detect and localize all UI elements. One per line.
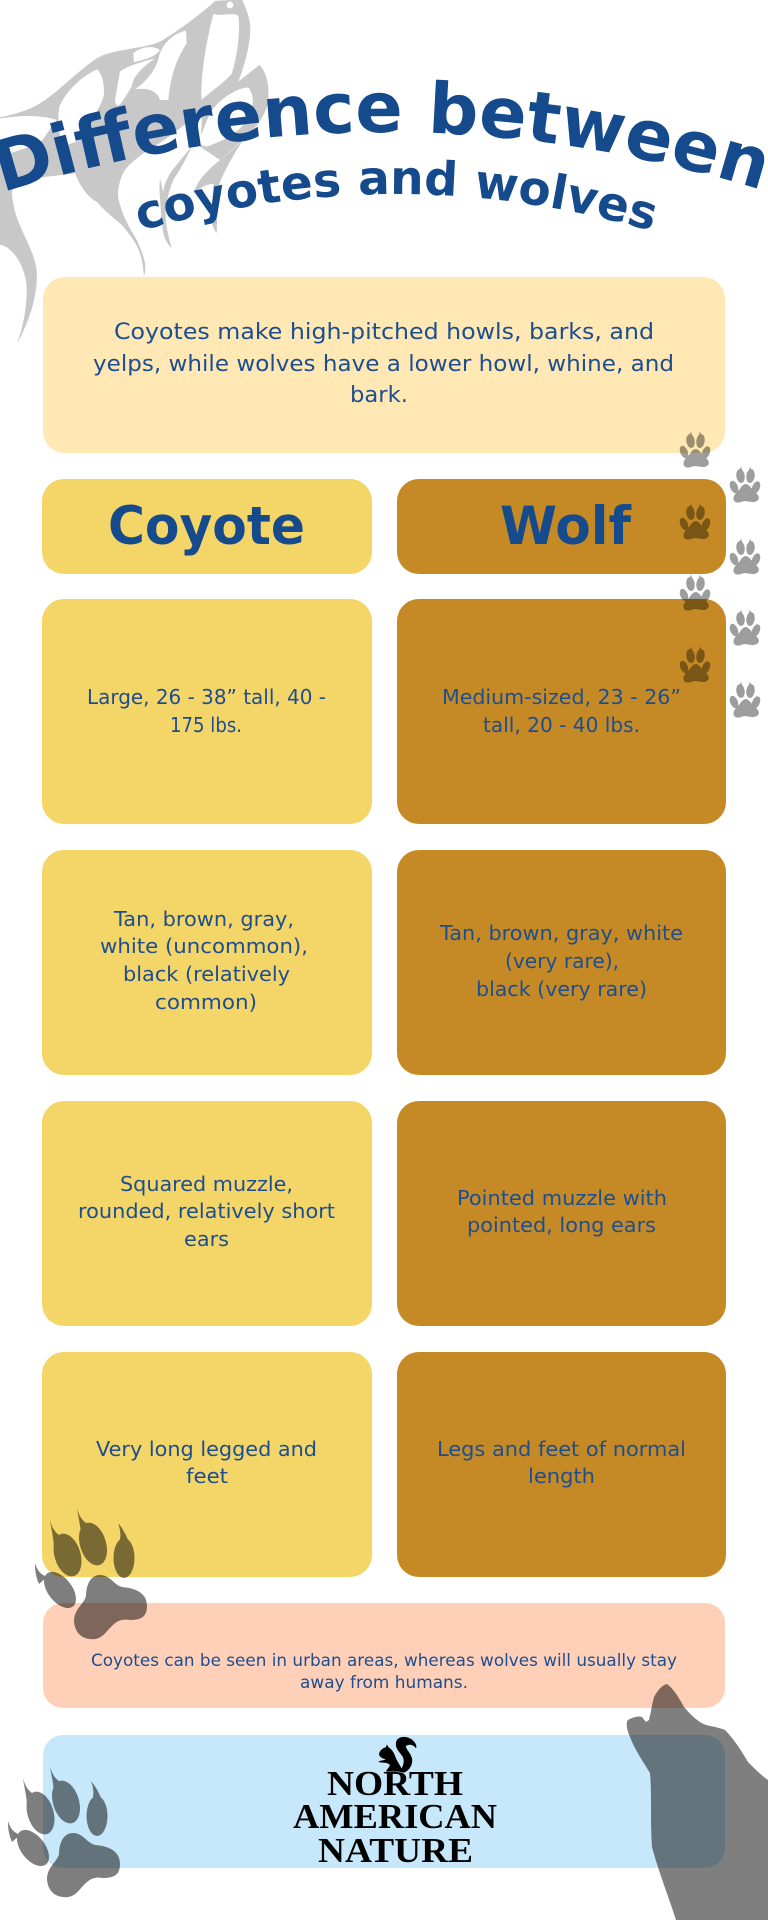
card: coyote color: white (uncommon), [100,934,308,958]
icon: large paw over logo panel [8,1766,120,1897]
card: coyote color [42,850,372,1075]
card: coyote size [42,599,372,824]
panel: intro: Coyotes make high-pitched howls, barks, and [114,319,654,345]
logo wordmark: AMERICAN [293,1797,497,1836]
card: wolf color: black (very rare) [476,977,647,1001]
card: coyote size: 175 lbs. [170,713,242,737]
panel: habitat note: Coyotes can be seen in urban areas, whereas wolves will usually stay [91,1651,677,1670]
panel: habitat note [43,1603,725,1708]
card: wolf legs [397,1352,726,1577]
title: coyotes and wolves [138,160,656,229]
card: coyote legs: feet [186,1464,228,1488]
panel: intro: bark. [350,382,408,408]
card: coyote muzzle: rounded, relatively short [78,1199,335,1223]
card: coyote color: black (relatively [123,962,290,986]
heading: Coyote [42,479,372,574]
wolf head and neck [0,0,250,343]
heading: Wolf [397,479,726,574]
card: wolf muzzle: Pointed muzzle with [457,1186,667,1210]
card: wolf muzzle: pointed, long ears [467,1213,656,1237]
background wolf: top-left howling silhouette [0,0,268,343]
logo wordmark [293,1764,497,1870]
icon: squirrel [378,1737,416,1773]
card: wolf size: Medium-sized, 23 - 26” [442,685,681,709]
wolf ear and jaw [200,65,268,160]
card: coyote muzzle [42,1101,372,1326]
logo wordmark: NATURE [318,1831,473,1870]
wolf white face details [0,2,253,157]
wolf mane streak right [193,140,243,233]
icon: small paw trail [678,432,762,718]
card: coyote color: Tan, brown, gray, [113,907,294,931]
card: wolf legs: length [528,1464,595,1488]
wolf mane streak middle [159,147,192,248]
card: coyote muzzle: ears [184,1227,229,1251]
card: coyote muzzle: Squared muzzle, [120,1172,293,1196]
card: wolf color [397,850,726,1075]
panel: habitat note: away from humans. [300,1673,468,1692]
card: wolf legs: Legs and feet of normal [437,1437,686,1461]
card: coyote legs [42,1352,372,1577]
card: coyote color: common) [155,990,257,1014]
card: coyote legs: Very long legged and [96,1437,317,1461]
card: coyote size: Large, 26 - 38” tall, 40 - [87,685,326,709]
card: wolf size [397,599,726,824]
card: wolf color: (very rare), [505,949,619,973]
heading: Wolf: Wolf [500,496,632,557]
panel: intro [43,277,725,453]
icon: large paw over coyote card [35,1508,147,1639]
icon: howling wolf silhouette bottom-right [627,1684,768,1920]
card: wolf size: tall, 20 - 40 lbs. [483,713,640,737]
card: wolf color: Tan, brown, gray, white [439,921,683,945]
panel: intro: yelps, while wolves have a lower howl, whine, and [93,351,674,377]
logo wordmark: NORTH [327,1764,463,1803]
card: wolf muzzle [397,1101,726,1326]
panel: logo [43,1735,725,1868]
heading: Coyote: Coyote [108,496,305,557]
